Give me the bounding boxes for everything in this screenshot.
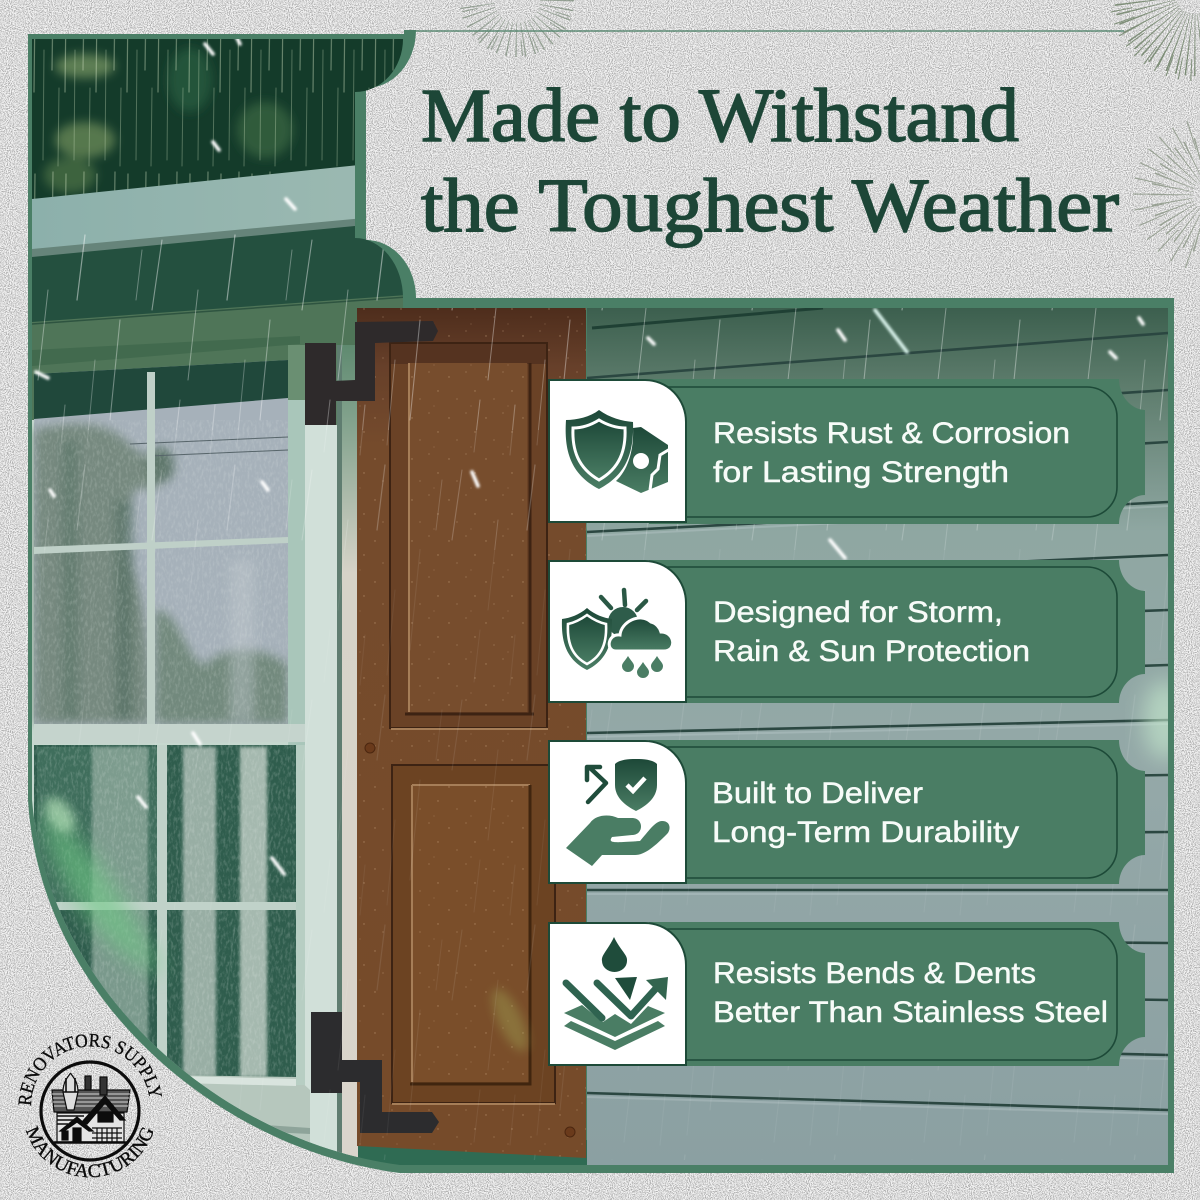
window side rails [288, 345, 358, 1160]
card 3 text: Built to Deliver [712, 777, 923, 810]
upper shutter panel [390, 343, 548, 729]
logo top text: RENOVATORS SUPPLY [18, 1034, 162, 1106]
card 4 text: Resists Bends & Dents [713, 957, 1036, 990]
upper window glass [34, 360, 288, 724]
card 4: bends and dents [549, 922, 1145, 1066]
meeting rail [34, 724, 305, 744]
card 1 text: Resists Rust & Corrosion [713, 417, 1070, 450]
brown shutter [357, 308, 586, 1158]
title: Made to Withstand [421, 74, 1019, 158]
card 1: rust and corrosion [549, 379, 1145, 524]
card 1 text [713, 417, 1070, 489]
upper window muntins [34, 372, 288, 724]
green strip below the shutter [358, 1140, 587, 1165]
decorative burst: top right [1120, 0, 1200, 70]
card 2 plate [549, 560, 1145, 703]
shutter rivets [365, 743, 575, 1137]
card 3 text [712, 777, 1019, 849]
logo house [52, 1073, 130, 1142]
card 1 plate [549, 379, 1145, 524]
blurred hail flakes [32, 39, 1146, 878]
card 2 text: Rain & Sun Protection [713, 635, 1030, 668]
thin top rule [411, 30, 1124, 32]
card 3: long-term durability [549, 740, 1145, 884]
fascia board [32, 165, 355, 257]
decorative burst: right edge [1148, 133, 1200, 257]
lower shutter panel [392, 765, 555, 1104]
bottom hinge [311, 1012, 439, 1133]
lower window glass with lace curtain [34, 745, 296, 1077]
card 3 text: Long-Term Durability [712, 816, 1019, 849]
logo: Renovators Supply Manufacturing [18, 1034, 162, 1178]
sill and lower panel [190, 745, 310, 1142]
icon: water drop, rising arrow and layers [564, 937, 668, 1050]
card 4 plate [549, 922, 1145, 1066]
icon: shield and corroded metal [566, 410, 670, 493]
window frame base [32, 420, 358, 1170]
card 4 text [713, 957, 1108, 1029]
title [421, 74, 1119, 248]
top hinge [305, 321, 438, 425]
logo bottom text: MANUFACTURING [26, 1125, 154, 1178]
lower window muntins [56, 745, 296, 1056]
soffit [32, 221, 407, 324]
card 3 plate [549, 740, 1145, 884]
card 2 text: Designed for Storm, [713, 596, 1003, 629]
card 1 text: for Lasting Strength [713, 456, 1009, 489]
siding [587, 308, 1187, 1168]
icon: shield, sun and rain cloud [562, 590, 673, 678]
olive flare on the shutter [489, 987, 532, 1053]
card 2 text [713, 596, 1030, 668]
icon: hand holding shield [566, 759, 670, 866]
title: the Toughest Weather [421, 164, 1119, 248]
decorative burst: top centre [469, 0, 565, 48]
card 2: storm, rain and sun [549, 560, 1145, 703]
rain streaks [32, 230, 1172, 1160]
card 4 text: Better Than Stainless Steel [713, 996, 1108, 1029]
green trim above the window [32, 295, 407, 430]
foliage behind the roof [32, 39, 407, 209]
green flare bottom left [39, 792, 165, 975]
